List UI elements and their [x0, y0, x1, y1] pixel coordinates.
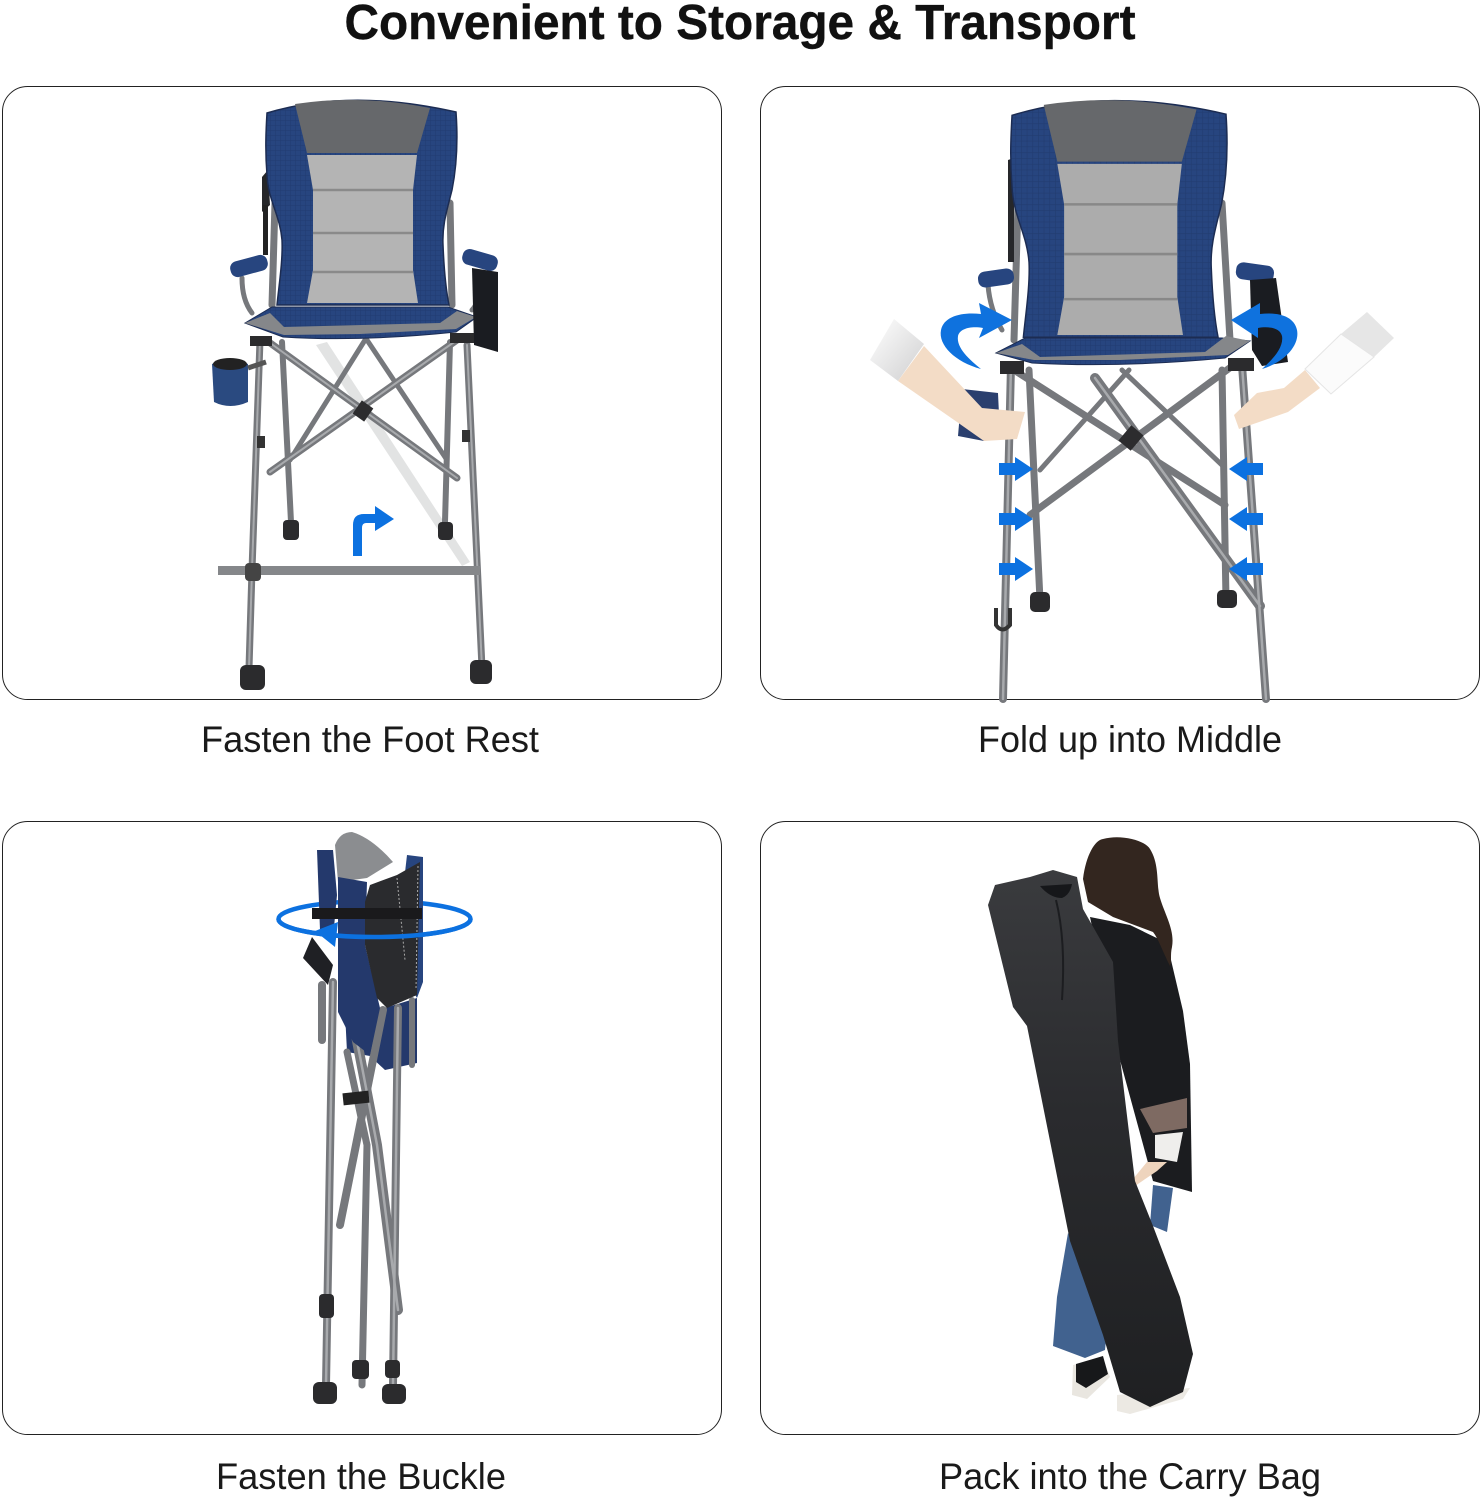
arrow: curved left rotate [941, 303, 1012, 369]
arrow: buckle strap front [278, 919, 470, 947]
caption: fasten the buckle: Fasten the Buckle [216, 1456, 506, 1497]
chair with foot rest [212, 100, 500, 690]
person carrying bag [1053, 837, 1192, 1414]
panel: fold up into middle [760, 86, 1480, 700]
caption: fold up into middle: Fold up into Middle [978, 719, 1282, 760]
panel: fasten the foot rest [2, 86, 722, 700]
carry bag [988, 870, 1193, 1407]
arrows: left leg inward [999, 457, 1033, 581]
panel: pack into the carry bag [760, 822, 1480, 1434]
folded chair [303, 832, 423, 1404]
cup holder [958, 389, 1000, 441]
arrow: blue foot rest lift [353, 506, 394, 556]
arrow: curved right rotate [1231, 303, 1297, 369]
caption: fasten the foot rest: Fasten the Foot Rest [201, 719, 540, 760]
right arm [1234, 312, 1394, 429]
chair being folded [958, 100, 1288, 699]
arrows: right leg inward [1229, 457, 1263, 581]
strap loop back [278, 901, 470, 937]
caption: pack into the carry bag: Pack into the Carry Bag [939, 1456, 1321, 1497]
left arm [870, 319, 1025, 441]
panel: fasten the buckle [2, 822, 722, 1434]
